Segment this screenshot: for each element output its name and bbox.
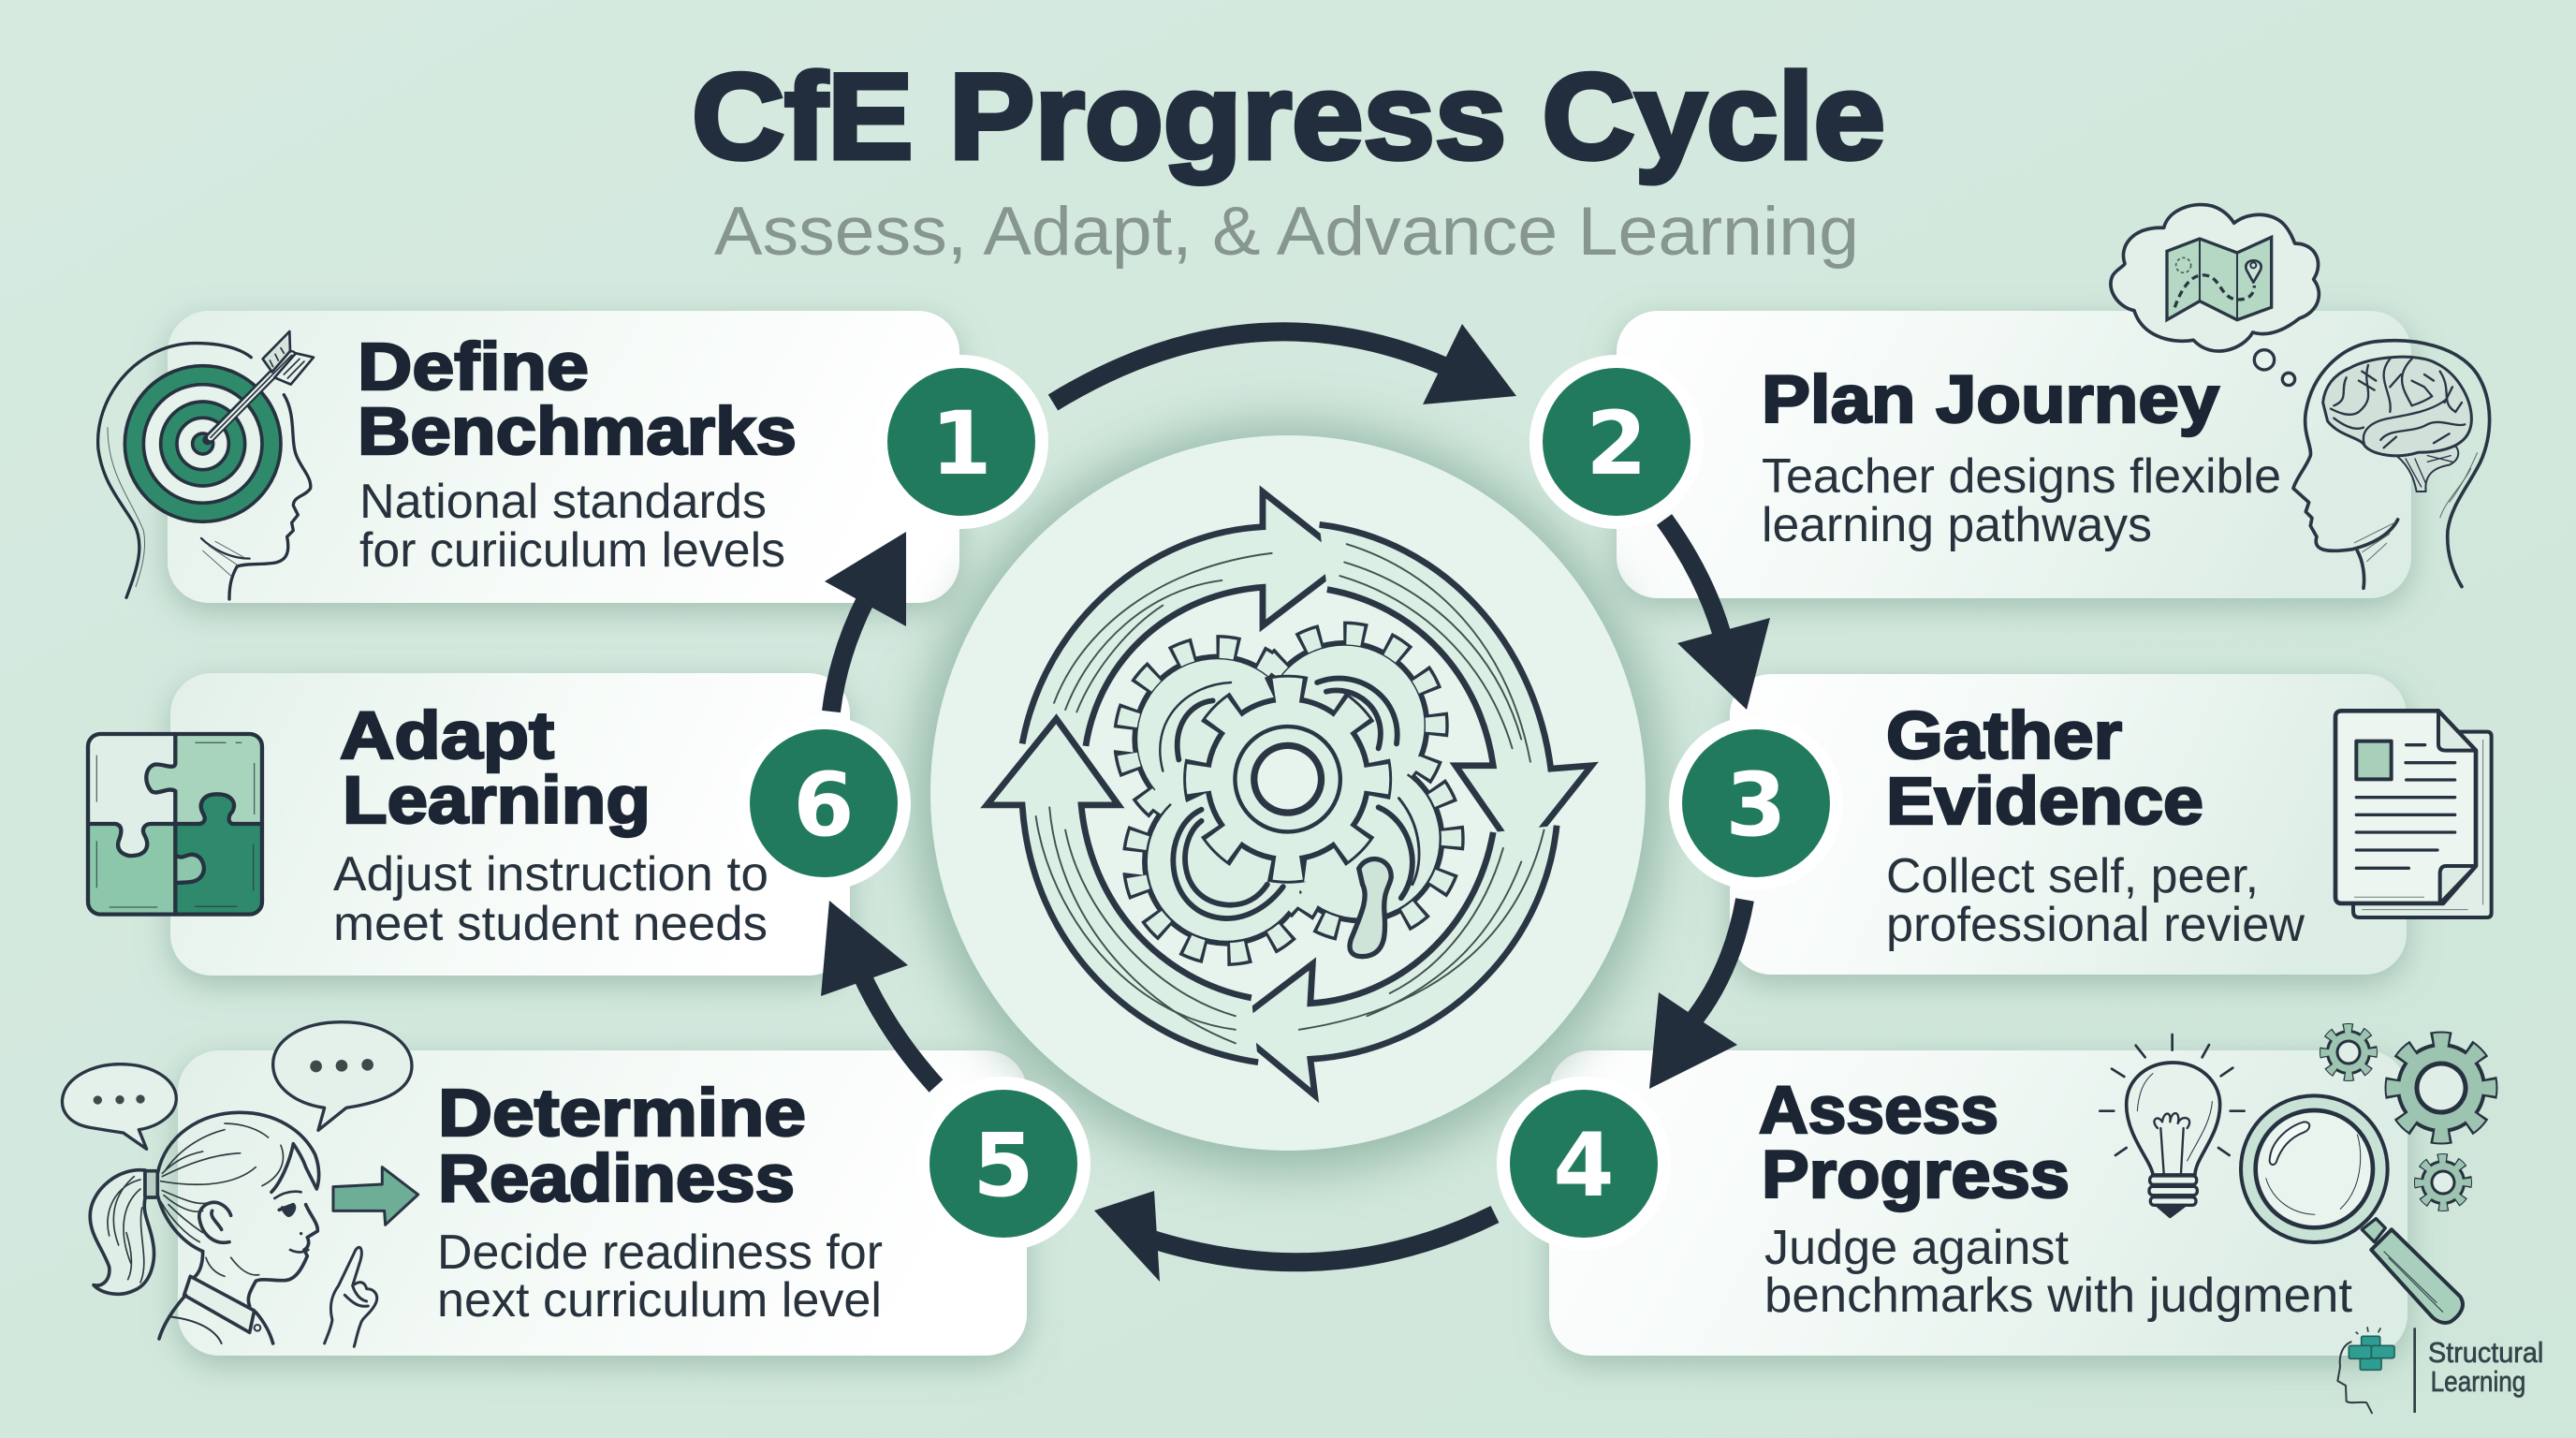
- icon: large gear: [2383, 1030, 2499, 1146]
- icon: small gear bottom: [2414, 1153, 2472, 1211]
- text: define benchmarks: Define: [358, 330, 589, 404]
- text: adapt learning: meet student needs: [333, 897, 768, 951]
- text: gather evidence: professional review: [1886, 898, 2305, 952]
- arrow: 6 to 1: [825, 532, 906, 712]
- number badge 1: 1: [930, 393, 992, 495]
- small arrow: [333, 1167, 418, 1225]
- number badge 4: 4: [1553, 1115, 1615, 1217]
- number badge 2: 2: [1586, 393, 1647, 495]
- logo: Structural Learning: Learning: [2431, 1366, 2525, 1398]
- number badge 6: [737, 716, 911, 890]
- hair strands: [108, 1123, 283, 1283]
- neck hatching: [2354, 452, 2478, 562]
- text: plan journey: Plan Journey: [1762, 363, 2220, 437]
- number badge 3: [1669, 716, 1843, 890]
- panel: define benchmarks card: [168, 311, 959, 603]
- number badge 5: 5: [973, 1115, 1034, 1217]
- top right piece: [146, 734, 262, 824]
- thought cloud: [2111, 205, 2319, 351]
- gear inner arcs: [1160, 679, 1419, 918]
- text: determine readiness: Determine: [438, 1077, 806, 1151]
- text: determine readiness: Decide readiness for: [437, 1225, 883, 1280]
- arrow hatching: [1036, 544, 1544, 1043]
- text: assess progress: Progress: [1762, 1138, 2070, 1212]
- text: adapt learning: Adjust instruction to: [333, 847, 768, 902]
- icon: small gear top: [2320, 1023, 2378, 1081]
- text: gather evidence: Evidence: [1886, 765, 2203, 839]
- curved arrow: top left: [1022, 492, 1349, 746]
- icon: cycle arrows and gears: [987, 492, 1591, 1095]
- curved arrow: bottom left: [987, 719, 1258, 1063]
- number badge 2: [1530, 355, 1704, 529]
- panel: gather evidence card: [1730, 674, 2407, 975]
- logo head: [2337, 1342, 2372, 1413]
- brain: [2323, 357, 2471, 492]
- number badge 1: [874, 355, 1048, 529]
- gear: central: [1179, 671, 1396, 888]
- curved arrow: bottom right: [1231, 826, 1557, 1095]
- icon: documents: [2335, 711, 2492, 917]
- text: assess progress: [1759, 1074, 2353, 1323]
- top left piece: [88, 734, 175, 856]
- arrow: 2 to 3: [1664, 520, 1770, 710]
- text: plan journey: Teacher designs flexible: [1762, 449, 2281, 504]
- arrow in target: [208, 331, 314, 440]
- text: gather evidence: Gather: [1886, 699, 2122, 773]
- logo divider: [2413, 1328, 2416, 1413]
- text: adapt learning: Learning: [343, 764, 651, 838]
- arrow: 5 to 6: [821, 901, 936, 1086]
- text: assess progress: Judge against: [1764, 1221, 2070, 1275]
- piece seams: [88, 734, 262, 915]
- pointing hand: [325, 1247, 377, 1346]
- subtitle: Assess, Adapt, & Advance Learning: [714, 194, 1859, 270]
- panel: plan journey card: [1617, 311, 2411, 598]
- key-shaped detail: [1350, 859, 1391, 957]
- panel: determine readiness card: [178, 1050, 1027, 1356]
- icon: magnifying glass: [2241, 1095, 2463, 1323]
- arrow: 1 to 2: [1053, 324, 1516, 404]
- bottom left piece: [88, 824, 204, 915]
- number badge 6: 6: [793, 755, 855, 857]
- head outline: [2293, 341, 2490, 588]
- logo text: Structural: [2428, 1337, 2543, 1369]
- text: determine readiness: [437, 1077, 883, 1328]
- central circle: [915, 425, 1661, 1170]
- icon: girl with speech bubbles and arrow: [62, 1022, 418, 1346]
- speech bubble right: [273, 1022, 412, 1130]
- arrow: 4 to 5: [1094, 1191, 1495, 1282]
- logo blocks: [2349, 1336, 2394, 1370]
- curved arrow: top right: [1320, 524, 1591, 858]
- text: plan journey: [1762, 363, 2281, 552]
- target: [124, 366, 281, 521]
- text: assess progress: benchmarks with judgment: [1764, 1269, 2353, 1323]
- girl figure: [90, 1112, 319, 1343]
- speech bubble left: [62, 1064, 176, 1149]
- logo rays: [2356, 1327, 2380, 1334]
- text: define benchmarks: Benchmarks: [358, 395, 797, 469]
- text: adapt learning: [333, 699, 768, 951]
- bottom right piece: [88, 734, 262, 915]
- panel: adapt learning card: [170, 673, 850, 976]
- head outline: [98, 344, 311, 599]
- title: CfE Progress Cycle: [692, 48, 1885, 184]
- text: determine readiness: Readiness: [438, 1142, 795, 1216]
- icon: light bulb: [2100, 1034, 2245, 1217]
- text: define benchmarks: National standards: [359, 475, 767, 529]
- text: gather evidence: Collect self, peer,: [1886, 849, 2259, 903]
- gear cluster: back gears silhouette: [1113, 622, 1465, 966]
- text: adapt learning: Adapt: [340, 699, 554, 773]
- icon: head with brain and thought bubble: [2111, 205, 2490, 588]
- text: define benchmarks: [358, 330, 797, 578]
- arrow: 3 to 4: [1649, 900, 1745, 1089]
- text: assess progress: Assess: [1759, 1074, 1998, 1148]
- text: plan journey: learning pathways: [1762, 498, 2152, 552]
- number badge 5: [916, 1077, 1090, 1251]
- icon: head with target: [98, 331, 314, 599]
- logo: Structural Learning: [2337, 1327, 2543, 1413]
- map: [2167, 237, 2272, 320]
- thought dots: [2254, 350, 2275, 370]
- panel: assess progress card: [1549, 1050, 2408, 1356]
- text: gather evidence: [1886, 699, 2305, 952]
- number badge 4: [1497, 1077, 1671, 1251]
- number badge 3: 3: [1725, 755, 1787, 857]
- text: define benchmarks: for curiiculum levels: [359, 523, 785, 578]
- icon: puzzle: [88, 734, 262, 915]
- text: determine readiness: next curriculum level: [437, 1273, 882, 1328]
